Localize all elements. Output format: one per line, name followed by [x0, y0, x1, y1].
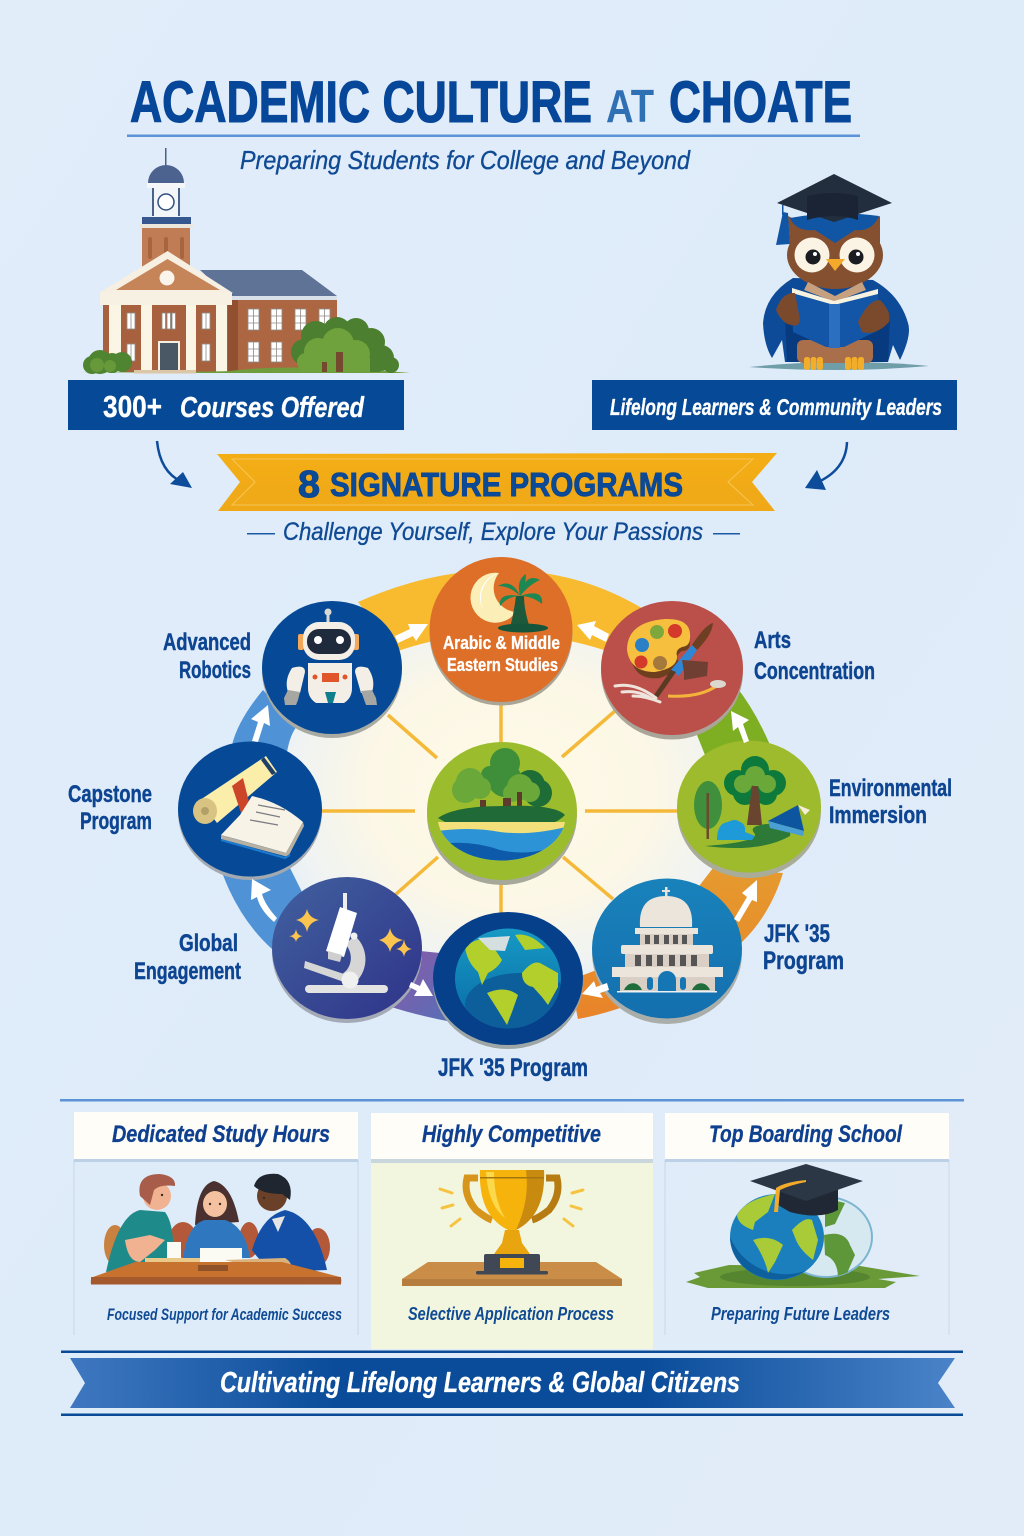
label: environmental immersion [829, 775, 952, 829]
spokes [322, 695, 680, 915]
bottom banner: Cultivating Lifelong Learners & Global Citizens [220, 1367, 740, 1399]
label: environmental immersion: Environmental [829, 775, 952, 802]
title: CHOATE [669, 70, 852, 135]
arrow: right to ribbon [805, 442, 847, 490]
arrow: robotics to arabic [395, 624, 428, 643]
panel: highly competitive [371, 1113, 653, 1349]
title: AT [606, 80, 654, 132]
ring segment: blue [223, 690, 302, 949]
arrow: capitol to environment [734, 880, 757, 922]
panel: top boarding school: Preparing Future Leaders [711, 1304, 890, 1324]
node: arabic and middle eastern studies: Eastern Studies [447, 655, 558, 675]
node: arabic and middle eastern studies: Arabic & Middle [443, 633, 560, 653]
node: arabic and middle eastern studies [430, 557, 572, 706]
ribbon: 8 signature programs: SIGNATURE PROGRAMS [330, 466, 683, 503]
illustration: students at table [91, 1174, 341, 1284]
label: arts concentration: Arts [754, 627, 791, 654]
ring segment: orange [570, 868, 783, 1019]
arrow: left to ribbon [157, 441, 192, 488]
label: capstone program [68, 781, 152, 835]
label: jfk program right [763, 920, 844, 975]
label: global engagement: Global [179, 930, 238, 957]
banner: courses: Courses Offered [180, 392, 365, 424]
chart: program ring [178, 557, 821, 1049]
ring segment: green [695, 685, 770, 755]
arrow: microscope to capstone [251, 879, 277, 922]
ribbon: 8 signature programs: 8 [298, 464, 320, 506]
node: global engagement microscope [272, 877, 422, 1023]
central glow [251, 605, 751, 1015]
bottom banner [61, 1350, 963, 1416]
node: globe [433, 912, 583, 1049]
node: center landscape [427, 742, 577, 885]
illustration: globe and cap [686, 1164, 920, 1288]
title: ACADEMIC CULTURE [130, 70, 592, 135]
ring segment: yellow [358, 570, 645, 652]
label: advanced robotics: Robotics [179, 657, 251, 684]
arrow: microscope to globe [409, 979, 433, 996]
label: jfk program right: JFK '35 [764, 920, 830, 948]
label: global engagement: Engagement [134, 958, 241, 985]
arrow: environment to arts [731, 711, 749, 743]
panel: dedicated study hours: Focused Support for Academic Success [107, 1305, 342, 1324]
label: advanced robotics: Advanced [163, 629, 251, 656]
panel: highly competitive: Selective Application Process [408, 1304, 614, 1324]
illustration: trophy [402, 1170, 622, 1286]
icon: school building [77, 148, 410, 374]
ring segment: purple [385, 950, 452, 1022]
label: jfk program right: Program [763, 947, 844, 975]
banner: courses [68, 380, 404, 430]
label: capstone program: Capstone [68, 781, 152, 808]
panel: top boarding school [665, 1113, 949, 1335]
node: arts concentration [601, 601, 743, 740]
arrow: arts to arabic [577, 621, 609, 642]
banner: lifelong learners [592, 380, 957, 430]
label: arts concentration: Concentration [754, 658, 875, 685]
label: environmental immersion: Immersion [829, 802, 927, 829]
node: environmental immersion [677, 740, 821, 878]
node: jfk program capitol [592, 878, 742, 1024]
icon: graduate owl [749, 174, 929, 370]
arrow: capitol to globe [582, 981, 609, 998]
tagline: Challenge Yourself, Explore Your Passions [283, 518, 703, 546]
node: capstone program [178, 742, 322, 880]
panel: top boarding school: Top Boarding School [709, 1121, 903, 1148]
label: global engagement [134, 930, 241, 985]
banner: courses: 300+ [103, 389, 162, 424]
node: advanced robotics [262, 601, 402, 738]
ribbon: 8 signature programs [217, 453, 777, 511]
label: capstone program: Program [80, 808, 152, 835]
arrow: capstone to robotics [251, 705, 270, 742]
label: arts concentration [754, 627, 875, 685]
panel: highly competitive: Highly Competitive [422, 1121, 601, 1148]
subtitle: Preparing Students for College and Beyond [240, 145, 691, 175]
panel: dedicated study hours [74, 1112, 358, 1335]
label: jfk program bottom: JFK '35 Program [438, 1054, 588, 1082]
label: advanced robotics [163, 629, 251, 684]
panel: dedicated study hours: Dedicated Study Hours [112, 1121, 330, 1148]
